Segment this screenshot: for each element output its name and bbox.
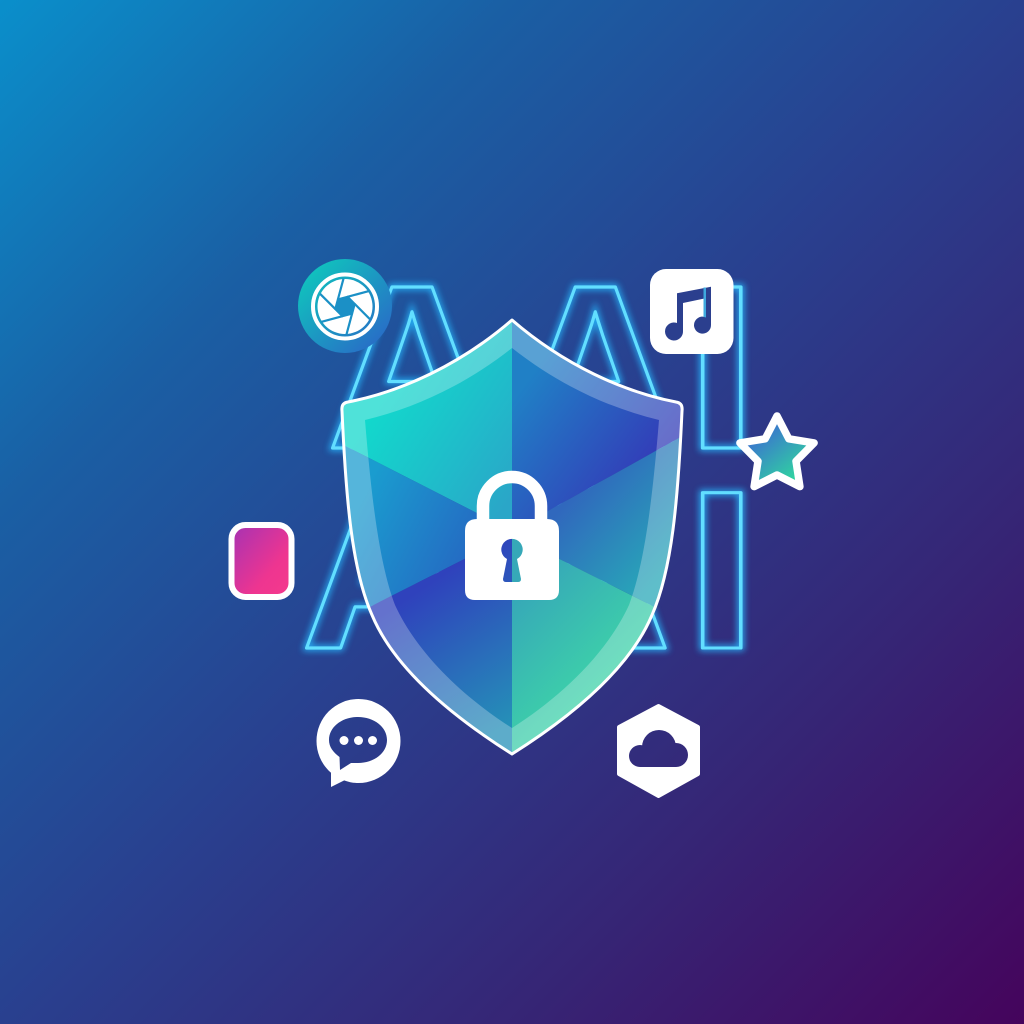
neon glow of letters: I: [685, 236, 758, 498]
icon: pink rounded tile: [232, 525, 292, 597]
shield outline: [342, 320, 682, 754]
shield facets: [343, 322, 680, 752]
chat dots: [340, 736, 377, 745]
icon: cloud hexagon: [619, 706, 698, 796]
neon glow of letters: A: [327, 236, 497, 498]
music note: [665, 287, 711, 340]
icon: music note tile: [650, 269, 734, 354]
chat bubble inner: [329, 717, 387, 770]
chat bubble body: [316, 699, 400, 783]
neon letter outlines: A: [501, 436, 671, 698]
neon letter outlines: A: [510, 236, 681, 498]
hexagon: [619, 706, 698, 796]
padlock shackle: [483, 477, 541, 523]
shield: [340, 318, 684, 756]
neon letter outlines: I: [685, 444, 758, 697]
neon letter outlines: I: [685, 236, 758, 498]
aperture ring: [313, 274, 377, 338]
neon letter outlines: A: [301, 436, 471, 698]
icon: padlock: [465, 477, 559, 600]
icon: star: [740, 416, 814, 487]
neon glow of letters: [301, 236, 758, 698]
neon glow of letters: A: [501, 436, 671, 698]
aperture blades: [312, 273, 378, 340]
icon: chat bubble: [316, 699, 400, 787]
neon AI letters: [301, 236, 758, 698]
padlock body with keyhole: [465, 519, 559, 600]
chat bubble tail: [331, 755, 355, 787]
aperture badge: [298, 259, 392, 353]
neon letter outlines: A: [327, 236, 497, 498]
cloud: [629, 730, 688, 767]
neon glow of letters: I: [685, 444, 758, 697]
neon glow of letters: A: [301, 436, 471, 698]
neon line behind note: [704, 288, 706, 318]
icon: camera aperture: [298, 259, 392, 353]
neon letter outlines: [301, 236, 758, 698]
music tile: [650, 269, 734, 354]
neon glow of letters: A: [510, 236, 681, 498]
shield translucent rim: [342, 320, 682, 754]
